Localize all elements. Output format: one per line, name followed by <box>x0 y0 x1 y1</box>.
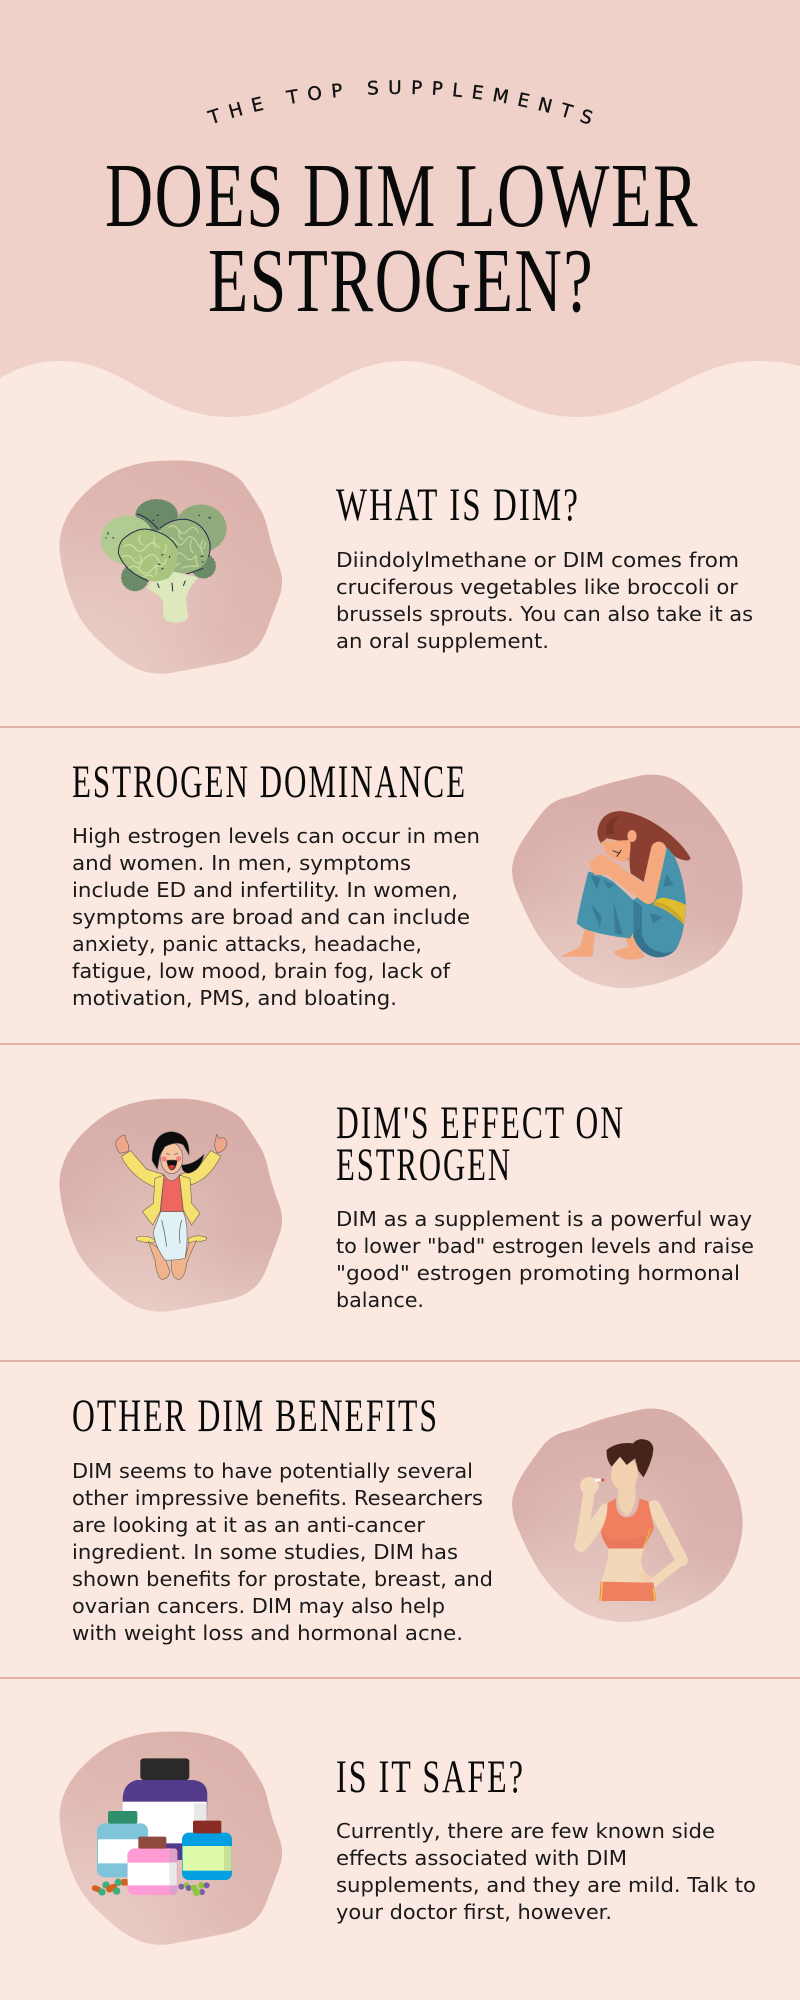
icon: woman taking pill on blob <box>515 1411 740 1620</box>
body text: effects associated with DIM <box>336 1846 627 1870</box>
body text <box>336 1819 756 1924</box>
body text: "good" estrogen promoting hormonal <box>336 1261 740 1285</box>
body text: anxiety, panic attacks, headache, <box>72 932 422 956</box>
heading: IS IT SAFE? <box>336 1751 525 1803</box>
panel: what is DIM <box>62 463 753 671</box>
panel: other DIM benefits <box>72 1390 740 1645</box>
title: ESTROGEN? <box>208 230 594 331</box>
panel: is it safe <box>62 1734 756 1942</box>
body text: shown benefits for prostate, breast, and <box>72 1567 493 1591</box>
body text: fatigue, low mood, brain fog, lack of <box>72 959 451 983</box>
panel: DIM's effect on estrogen <box>62 1097 754 1312</box>
body text: motivation, PMS, and bloating. <box>72 986 397 1010</box>
body text: balance. <box>336 1288 424 1312</box>
body text: Diindolylmethane or DIM comes from <box>336 548 739 572</box>
body text: brussels sprouts. You can also take it as <box>336 602 753 626</box>
body text: are looking at it as an anti-cancer <box>72 1513 426 1537</box>
icon: broccoli on blob <box>62 463 280 671</box>
body text <box>72 1459 493 1645</box>
body text <box>336 548 753 653</box>
body text: symptoms are broad and can include <box>72 905 470 929</box>
heading: ESTROGEN DOMINANCE <box>72 756 467 808</box>
body text: other impressive benefits. Researchers <box>72 1486 483 1510</box>
title <box>105 145 699 331</box>
body text: ovarian cancers. DIM may also help <box>72 1594 445 1618</box>
heading: ESTROGEN <box>336 1139 512 1191</box>
body text: cruciferous vegetables like broccoli or <box>336 575 739 599</box>
header band with wave <box>0 0 800 417</box>
icon: supplement bottles on blob <box>62 1734 280 1942</box>
body text: to lower "bad" estrogen levels and raise <box>336 1234 754 1258</box>
body text: supplements, and they are mild. Talk to <box>336 1873 756 1897</box>
body text: an oral supplement. <box>336 629 549 653</box>
body text: High estrogen levels can occur in men <box>72 824 480 848</box>
icon: jumping woman on blob <box>62 1101 280 1309</box>
heading: WHAT IS DIM? <box>336 479 580 531</box>
body text: ingredient. In some studies, DIM has <box>72 1540 458 1564</box>
heading: DIM'S EFFECT ON <box>336 1097 625 1149</box>
body text <box>336 1207 754 1312</box>
body text: your doctor first, however. <box>336 1900 612 1924</box>
heading <box>336 1097 625 1191</box>
heading: OTHER DIM BENEFITS <box>72 1390 439 1442</box>
icon: sad woman on blob <box>515 777 740 986</box>
eyebrow: curved text: THE TOP SUPPLEMENTS <box>206 80 592 124</box>
body text: DIM seems to have potentially several <box>72 1459 473 1483</box>
body text <box>72 824 480 1010</box>
body text: DIM as a supplement is a powerful way <box>336 1207 752 1231</box>
body text: include ED and infertility. In women, <box>72 878 458 902</box>
body text: Currently, there are few known side <box>336 1819 715 1843</box>
body text: with weight loss and hormonal acne. <box>72 1621 463 1645</box>
body text: and women. In men, symptoms <box>72 851 411 875</box>
panel: estrogen dominance <box>72 756 740 1010</box>
